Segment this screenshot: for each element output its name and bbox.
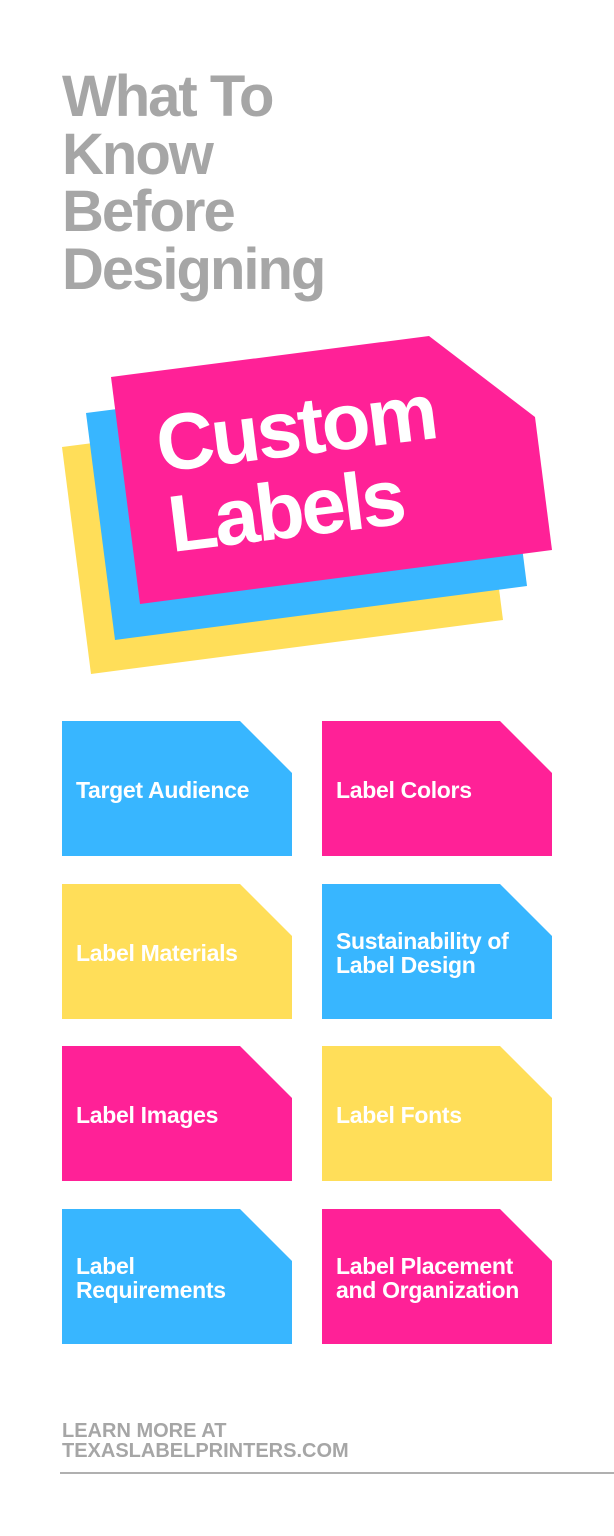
card: Label Fonts — [322, 1046, 552, 1181]
title: What To — [62, 64, 272, 129]
card: Sustainability: Label Design — [336, 952, 476, 978]
card: Label Fonts: Label Fonts — [336, 1102, 462, 1128]
footer text: LEARN MORE AT — [62, 1420, 226, 1442]
card: Sustainability: Sustainability of — [336, 928, 509, 954]
card: Label Materials: Label Materials — [76, 940, 238, 966]
pink label layer with text: Custom — [151, 366, 440, 489]
card: Label Placement: and Organization — [336, 1276, 519, 1302]
card: Label Colors — [322, 721, 552, 856]
card: Sustainability — [322, 884, 552, 1019]
card: Label Materials — [62, 884, 292, 1019]
card: Label Placement — [322, 1209, 552, 1344]
card: Label Placement: Label Placement — [336, 1252, 513, 1278]
pink label layer with text — [111, 336, 552, 604]
card: Target Audience — [62, 721, 292, 856]
card: Label Requirements: Requirements — [76, 1276, 226, 1302]
footer text: TEXASLABELPRINTERS.COM — [62, 1440, 349, 1462]
footer text — [62, 1420, 349, 1462]
card: Target Audience: Target Audience — [76, 776, 249, 802]
title: Designing — [62, 236, 324, 302]
hero: stacked labels — [62, 336, 552, 674]
title: Know — [62, 122, 212, 186]
pink label layer with text: Labels — [163, 452, 408, 569]
card: Label Requirements: Label — [76, 1252, 135, 1278]
blue label layer — [86, 372, 527, 640]
title — [62, 64, 324, 302]
title: Before — [62, 179, 234, 244]
card: Label Images — [62, 1046, 292, 1181]
card: Label Requirements — [62, 1209, 292, 1344]
card: Label Colors: Label Colors — [336, 776, 472, 802]
card: Label Images: Label Images — [76, 1102, 218, 1128]
yellow label layer — [62, 406, 503, 674]
